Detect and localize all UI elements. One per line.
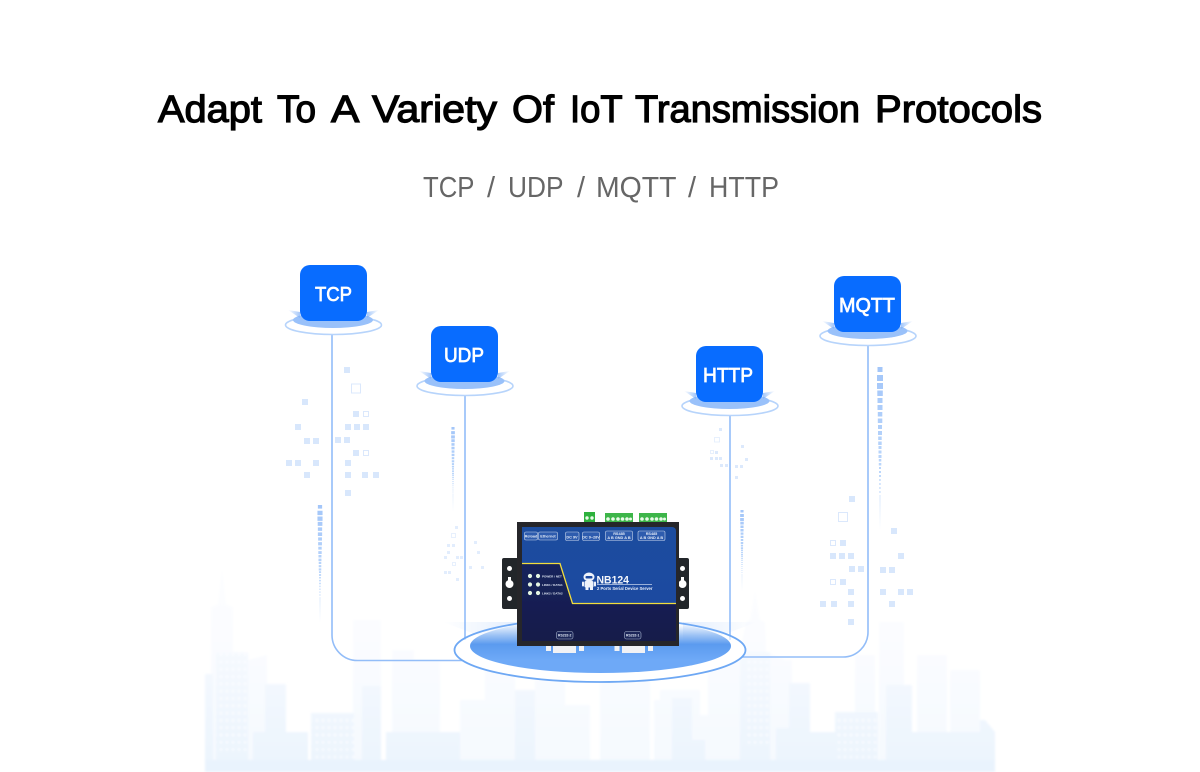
title: Protocols	[875, 89, 1042, 131]
subtitle: TCP	[423, 172, 474, 204]
device: serial server NB124	[502, 512, 689, 653]
subtitle: /	[487, 172, 496, 204]
TCP badge: TCP	[315, 284, 352, 306]
subtitle: UDP	[508, 172, 563, 204]
base platform under device	[443, 618, 757, 682]
title: Variety	[372, 89, 497, 131]
RS232 labels bottom: RS232-1	[626, 634, 640, 638]
top label text: A B GND A B	[640, 536, 663, 540]
connector line: HTTP to device	[729, 416, 731, 640]
name underline	[597, 583, 652, 586]
title: Transmission	[635, 89, 860, 131]
top label text: Ethernet	[540, 534, 556, 538]
subtitle: /	[577, 172, 586, 204]
subtitle: MQTT	[596, 172, 677, 204]
product subtitle: 2 Ports Serial Device Server	[597, 586, 653, 591]
green terminal blocks	[584, 512, 667, 522]
top label text: DC 9V	[566, 536, 578, 540]
LED captions: LINK2 / DATA2	[542, 592, 563, 596]
MQTT badge: MQTT	[839, 295, 895, 317]
top label text	[525, 532, 663, 540]
connector line: UDP to device	[464, 396, 466, 640]
HTTP badge	[682, 346, 778, 416]
yellow stripe	[522, 564, 676, 604]
decorative pixel squares: UDP zone	[444, 526, 484, 581]
UDP badge	[417, 326, 513, 396]
DB9 connectors	[546, 645, 653, 653]
port labels top	[524, 531, 665, 540]
lower navy panel with yellow stripe	[522, 563, 676, 641]
RS232 labels bottom: RS232-2	[558, 634, 572, 638]
decorative pixel squares: MQTT zone	[820, 496, 913, 625]
top label text: A B GND A B	[607, 536, 631, 540]
icon: robot mascot	[582, 572, 596, 590]
decorative pixel squares: HTTP zone	[710, 428, 748, 479]
top label text: Reload	[525, 534, 538, 538]
decorative pixel squares: TCP zone	[286, 367, 379, 496]
title: Of	[512, 89, 554, 131]
status LEDs	[528, 574, 540, 595]
front panel	[522, 527, 676, 641]
LED captions	[542, 574, 563, 596]
TCP badge	[286, 265, 382, 334]
connector line: TCP to device	[332, 334, 470, 660]
connector line: MQTT to device	[735, 346, 868, 657]
title: IoT	[570, 89, 622, 131]
subtitle: HTTP	[709, 172, 779, 204]
UDP badge: UDP	[444, 345, 484, 367]
dotted signal bars	[317, 367, 883, 622]
mounting ears	[502, 558, 689, 609]
subtitle: /	[688, 172, 697, 204]
top label text: DC 9~28V	[582, 536, 600, 540]
title: A	[331, 89, 360, 131]
top label text: RS485	[646, 532, 657, 536]
HTTP badge: HTTP	[703, 365, 753, 387]
LED captions: POWER / NET	[542, 574, 562, 578]
MQTT badge	[820, 276, 916, 346]
title: To	[277, 89, 316, 131]
city skyline backdrop	[205, 568, 995, 772]
device body	[517, 522, 679, 646]
title: Adapt	[158, 89, 262, 131]
product name: NB124	[596, 574, 630, 586]
RS232 labels bottom	[556, 632, 641, 639]
LED captions: LINK1 / DATA1	[542, 583, 563, 587]
top label text: RS485	[613, 532, 625, 536]
